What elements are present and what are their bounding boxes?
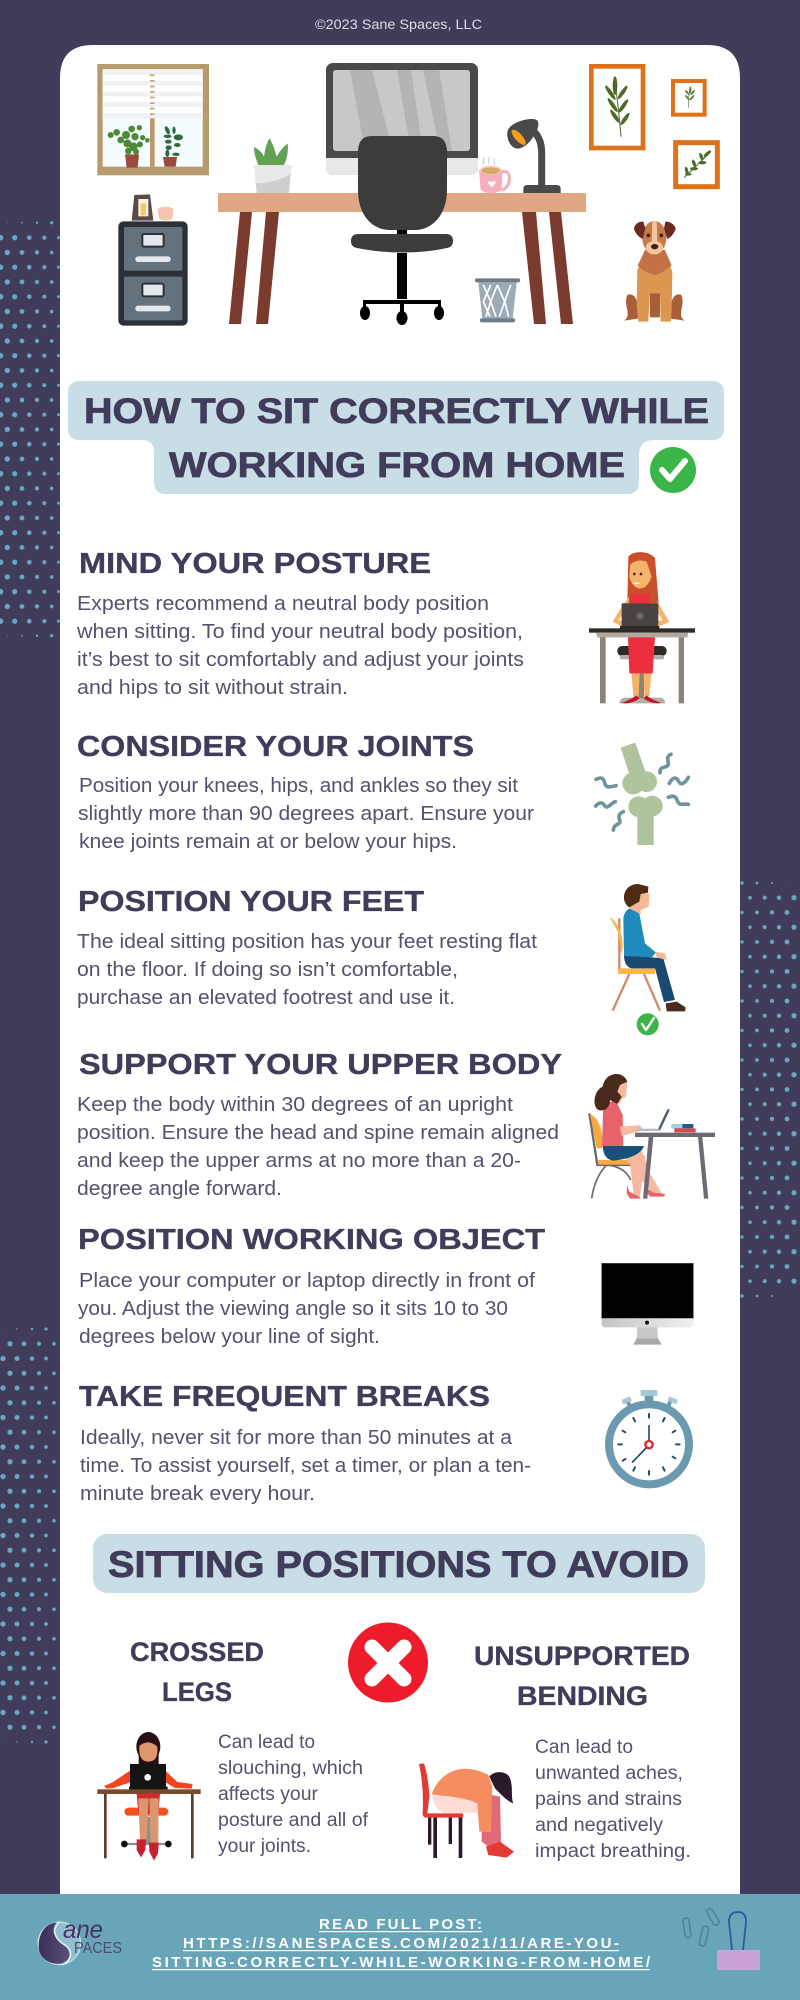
text: crossed legs effects: slouching, which [218,1758,363,1779]
heading: sitting positions to avoid: SITTING POSITIONS TO AVOID [108,1544,689,1585]
heading: sitting positions to avoid [93,1534,705,1593]
icon: desk lamp [507,119,561,193]
section: mind your posture [76,548,524,699]
heading: unsupported bending: UNSUPPORTED [474,1641,690,1671]
logo: Sane Spaces [38,1916,122,1965]
logo: Sane Spaces: PACES [74,1940,122,1957]
icon: green check [650,447,696,493]
section: support your upper body: position. Ensure the head and spine remain aligned [77,1122,559,1144]
section: consider your joints: slightly more than 90 degrees apart. Ensure your [78,803,534,825]
heading: crossed legs: LEGS [162,1677,232,1707]
section: mind your posture: and hips to sit without strain. [77,677,348,699]
section: support your upper body: Keep the body within 30 degrees of an upright [77,1094,513,1116]
text: unsupported bending effects: unwanted aches, [535,1763,683,1784]
copyright line: ©2023 Sane Spaces, LLC [315,17,482,32]
text: unsupported bending effects [535,1737,691,1862]
section: position working object: POSITION WORKING OBJECT [78,1224,545,1256]
desk [218,193,586,324]
text: unsupported bending effects: impact breathing. [535,1841,691,1862]
section: position working object: degrees below your line of sight. [79,1326,380,1348]
illustration: home office scene [97,63,717,326]
section: position your feet: purchase an elevated footrest and use it. [77,987,455,1009]
section: consider your joints: knee joints remain at or below your hips. [79,831,457,853]
icon: woman typing at table [589,1074,715,1199]
section: position working object: you. Adjust the viewing angle so it sits 10 to 30 [78,1298,508,1320]
heading: unsupported bending [474,1641,690,1711]
heading: main title [68,381,724,494]
section: support your upper body: SUPPORT YOUR UPPER BODY [79,1049,562,1081]
icon: woman with crossed legs [97,1732,201,1861]
icon: dog [624,221,685,322]
section: consider your joints: CONSIDER YOUR JOINTS [77,731,474,763]
text: unsupported bending effects: pains and strains [535,1789,682,1810]
section: position your feet [77,886,537,1009]
icon: waste basket [475,278,520,322]
text: unsupported bending effects: and negatively [535,1815,664,1836]
section: mind your posture: when sitting. To find your neutral body position, [76,621,523,643]
text: read full post link: READ FULL POST: [319,1916,482,1933]
icon: wall frames with ferns [591,66,717,187]
section: mind your posture: Experts recommend a neutral body position [77,593,489,615]
heading: main title: HOW TO SIT CORRECTLY WHILE [84,392,709,431]
icon: binder clip and paperclips [683,1908,760,1970]
icon: knee joint bones [596,743,688,845]
icon: person bending forward on chair [419,1763,514,1858]
section: take frequent breaks: time. To assist yourself, set a timer, or plan a ten- [80,1455,531,1477]
section: take frequent breaks [79,1381,531,1505]
logo: Sane Spaces: ane [63,1916,103,1944]
text: crossed legs effects [218,1732,369,1857]
section: mind your posture: it’s best to sit comfortably and adjust your joints [77,649,524,671]
section: take frequent breaks: TAKE FREQUENT BREAKS [79,1381,490,1413]
section: position your feet: on the floor. If doing so isn’t comfortable, [77,959,458,981]
heading: crossed legs [130,1637,264,1707]
icon: monitor [326,63,478,175]
text: crossed legs effects: affects your [218,1784,319,1805]
heading: main title: WORKING FROM HOME [169,446,625,485]
heading: crossed legs: CROSSED [130,1637,264,1667]
heading: unsupported bending: BENDING [517,1681,648,1711]
icon: office chair [351,136,453,325]
icon: desk plant [254,138,292,193]
icon: desktop computer [602,1263,693,1345]
icon: mug [479,157,509,193]
text: crossed legs effects: posture and all of [218,1810,369,1831]
section: support your upper body [77,1049,562,1200]
text: read full post link: SITTING-CORRECTLY-WHILE-WORKING-FROM-HOME/ [152,1954,651,1971]
icon: window with plants [97,64,209,175]
panel: crossed legs [97,1637,369,1861]
section: position working object [78,1224,545,1348]
icon: stopwatch [609,1390,689,1484]
section: take frequent breaks: minute break every hour. [80,1483,315,1505]
text: crossed legs effects: Can lead to [218,1732,315,1753]
panel: white content card [60,45,740,1894]
icon: red cross [348,1622,428,1702]
icon: small green check [637,1013,659,1035]
section: position working object: Place your computer or laptop directly in front of [79,1270,535,1292]
panel: footer banner [0,1894,800,2000]
text: crossed legs effects: your joints. [218,1836,311,1857]
text: read full post link [152,1916,651,1971]
text: unsupported bending effects: Can lead to [535,1737,633,1758]
icon: filing cabinet [118,194,188,326]
section: consider your joints [77,731,534,853]
icon: woman at laptop desk [589,552,695,703]
section: support your upper body: degree angle forward. [77,1178,282,1200]
section: support your upper body: and keep the upper arms at no more than a 20- [77,1150,521,1172]
section: consider your joints: Position your knees, hips, and ankles so they sit [79,775,518,797]
icon: man seated on chair [609,884,686,1011]
section: mind your posture: MIND YOUR POSTURE [79,548,431,580]
text: read full post link: HTTPS://SANESPACES.COM/2021/11/ARE-YOU- [183,1935,619,1952]
panel: unsupported bending [419,1641,691,1862]
section: position your feet: POSITION YOUR FEET [78,886,424,918]
section: position your feet: The ideal sitting position has your feet resting flat [77,931,537,953]
section: take frequent breaks: Ideally, never sit for more than 50 minutes at a [80,1427,513,1449]
